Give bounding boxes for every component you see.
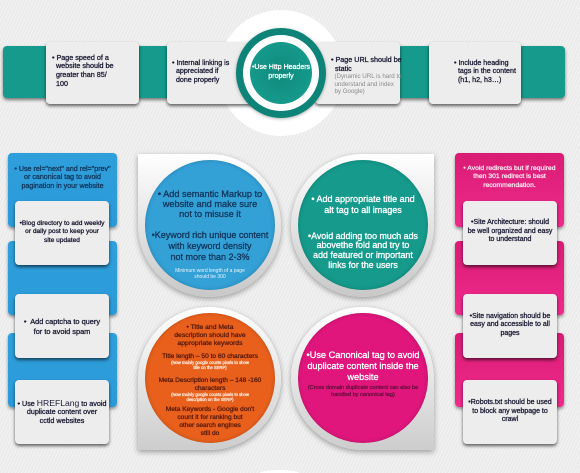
text: title note: (Now mainly google counts pixels to show (171, 360, 249, 365)
text: hreflang: duplicate content over (27, 407, 97, 416)
text: meta description length: characters (195, 385, 225, 392)
teal tab 3 (398, 46, 448, 98)
text: avoid redirects: • Avoid redirects but if required (463, 164, 556, 172)
blue tab 1 (8, 153, 117, 227)
text: use http headers: •Use Http Headers (252, 64, 310, 71)
text: page URL: understand and index (334, 81, 394, 88)
text: site navigation (470, 312, 550, 337)
tile: pink (291, 307, 434, 450)
text: semantic markup: • Add semantic Markup to (158, 189, 262, 199)
orange circle (145, 313, 275, 443)
text: avoid redirects: then 301 redirect is best (473, 173, 546, 180)
text: page speed: 100 (56, 79, 68, 88)
text: captcha (24, 317, 100, 336)
text: meta keywords: count it for ranking but (177, 414, 243, 421)
text: title and meta (174, 324, 246, 347)
card: site navigation (463, 294, 557, 358)
text: meta keywords (166, 406, 254, 437)
text: avoid redirects: recommendation. (483, 182, 536, 189)
tile: teal (291, 154, 434, 297)
text: keyword rich: with keyword density (168, 241, 252, 251)
text: keyword rich (152, 230, 268, 262)
text: heading tags: • Include heading (454, 58, 509, 66)
pink tab 3 (455, 333, 564, 407)
text: blog directory (20, 220, 105, 244)
panel: top row of tips (0, 10, 568, 136)
pink tab 1 (455, 153, 564, 227)
white disc at bottom edge (260, 470, 299, 473)
text: minimum word length (175, 268, 245, 280)
text: site navigation: •Site navigation should be (470, 312, 550, 320)
blue tab 3 (8, 333, 117, 407)
text: canonical tag: website (347, 372, 379, 382)
text: title and meta: • Title and Meta (187, 324, 233, 331)
text: rel next prev: or canonical tag to avoid (24, 173, 101, 181)
text: hreflang: • Use HREFLang to avoid (18, 398, 106, 408)
teal circle (298, 160, 428, 290)
text: heading tags: tags in the content (458, 67, 516, 75)
text: canonical tag: •Use Canonical tag to avoid (306, 350, 420, 360)
text: alt tags: • Add appropriate title and (311, 194, 415, 204)
hub inner white ring (243, 35, 319, 111)
tile: orange (138, 307, 281, 450)
text: page speed: • Page speed of a (52, 52, 109, 62)
text: page speed (52, 52, 114, 88)
text: captcha: for to avoid spam (34, 327, 90, 336)
text: page speed: website should be (56, 61, 114, 70)
text: site navigation: pages (500, 330, 520, 337)
text: robots.txt: crawl (502, 416, 518, 423)
hub inner teal circle (250, 42, 312, 104)
text: robots.txt (468, 398, 552, 423)
text: keyword rich: not more than 2-3% (170, 252, 250, 262)
text: too much ads: links for the users (328, 260, 398, 270)
text: internal linking: appreciated if (176, 67, 219, 75)
text: semantic markup (158, 189, 262, 219)
text: site navigation: easy and accessible to all (470, 321, 550, 328)
panel: centre tile grid (134, 152, 438, 456)
text: page URL: static (335, 64, 352, 73)
text: heading tags (454, 58, 516, 84)
text: blog directory: •Blog directory to add weekly (20, 220, 104, 226)
text: site architecture: be well organized and easy (468, 228, 552, 235)
text: page URL (331, 55, 402, 95)
text: meta description note (171, 392, 250, 402)
text: minimum word length: Minimum word length of a page (175, 268, 245, 274)
text: meta description note: (Now mainly google counts pixels to show (171, 392, 249, 397)
text: site architecture: •Site Architecture: should (471, 219, 549, 226)
card: heading tags (429, 42, 521, 104)
text: page URL: • Page URL should be (331, 55, 402, 64)
text: hreflang (18, 398, 106, 425)
text: meta description note: description on the SERP) (186, 397, 234, 402)
text: page speed: greater than 85/ (56, 70, 107, 79)
text: captcha: • Add captcha to query (24, 317, 100, 326)
panel: left blue column (6, 153, 119, 448)
text: title and meta: appropriate keywords (178, 340, 242, 347)
text: internal linking: • Internal linking is (172, 58, 229, 66)
teal tab 2 (119, 46, 170, 98)
blue circle (145, 160, 275, 290)
text: blog directory: or daily post to keep your (25, 228, 99, 235)
tile: blue (138, 154, 281, 297)
text: avoid redirects (463, 164, 556, 189)
text: cross domain (308, 384, 418, 398)
text: title length: Title length – 50 to 60 characters (162, 353, 258, 360)
text: meta keywords: other search engines (179, 422, 241, 429)
pink circle (298, 313, 428, 443)
text: semantic markup: not to misuse it (179, 209, 241, 219)
text: too much ads: add featured or important (313, 250, 413, 260)
text: rel next prev: • Use rel="next" and rel="prev" (14, 164, 111, 172)
text: meta keywords: Meta Keywords - Google don't (166, 406, 254, 413)
text: title note (171, 360, 250, 370)
text: site architecture: to understand (489, 236, 531, 243)
card: robots.txt (463, 380, 557, 444)
text: rel next prev: pagination in your website (21, 182, 104, 190)
card: hreflang (15, 380, 109, 444)
card: captcha (15, 294, 109, 358)
text: semantic markup: website and make sure (163, 199, 257, 209)
card: internal linking (167, 42, 257, 104)
hub ring (236, 28, 326, 118)
blue tab 2 (8, 241, 117, 315)
card: page URL (315, 42, 400, 104)
text: canonical tag: duplicate content inside the (307, 361, 419, 371)
text: title note: title on the SERP) (193, 365, 227, 370)
text: minimum word length: should be 300 (194, 274, 226, 280)
text: cross domain: handled by canonical tag) (331, 392, 395, 398)
card: page speed (46, 42, 139, 104)
text: blog directory: site updated (44, 237, 80, 244)
text: internal linking (172, 58, 230, 84)
white hub disc (218, 10, 344, 136)
text: keyword rich: •Keyword rich unique content (152, 230, 268, 240)
panel: right pink column (453, 153, 566, 448)
text: too much ads (308, 230, 418, 270)
text: title and meta: description should have (174, 332, 246, 339)
pink tab 2 (455, 241, 564, 315)
text: page URL: by Google) (334, 88, 365, 95)
text: canonical tag (306, 350, 420, 382)
text: too much ads: abovethe fold and try to (317, 240, 409, 250)
text: alt tags (311, 194, 415, 216)
teal tab 1 (3, 46, 53, 98)
text: internal linking: done properly (176, 76, 219, 84)
text: hreflang: cctld websites (40, 416, 84, 425)
text: site architecture (468, 218, 552, 243)
text: use http headers: properly (268, 73, 294, 80)
text: use http headers (252, 63, 310, 80)
text: robots.txt: •Robots.txt should be used (468, 399, 552, 406)
text: meta keywords: still do (201, 430, 219, 437)
text: robots.txt: to block any webpage to (472, 408, 548, 415)
text: meta description length: Meta Description length – 148 -160 (159, 377, 261, 384)
text: alt tags: alt tag to all images (324, 205, 402, 215)
text: heading tags: (h1, h2, h3…) (458, 76, 501, 84)
card: site architecture (463, 201, 557, 265)
text: too much ads: •Avoid adding too much ads (308, 230, 418, 240)
text: cross domain: (Cross domain duplicate content can also be (308, 385, 418, 391)
card: blog directory (15, 201, 109, 265)
teal tab 4 (518, 46, 565, 98)
text: meta description length (159, 377, 262, 392)
text: page URL: (Dynamic URL is hard to (334, 73, 402, 80)
text: rel next prev (14, 164, 111, 190)
